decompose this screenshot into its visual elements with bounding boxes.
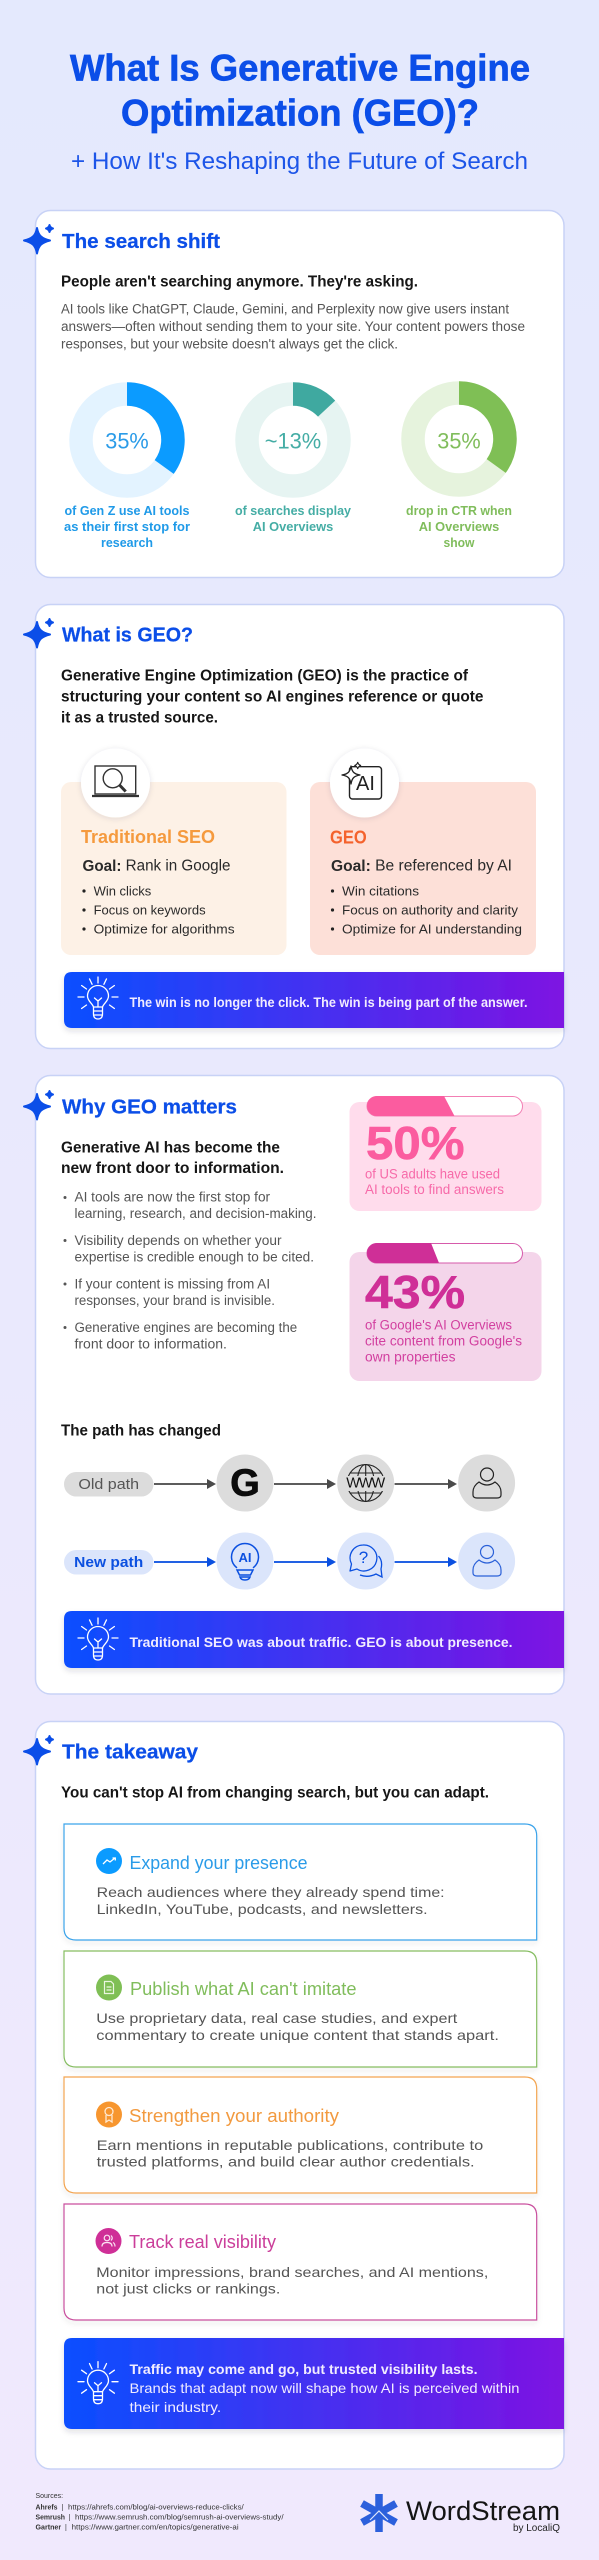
bullet list: Optimize for algorithms (94, 922, 235, 936)
comparison card: traditional SEO (61, 748, 286, 955)
icon: sparkle (24, 1736, 53, 1764)
card body: LinkedIn, YouTube, podcasts, and newsletters. (97, 1901, 428, 1917)
stat label (365, 1318, 522, 1364)
subtitle: + How It's Reshaping the Future of Search (71, 148, 528, 175)
donut chart: 35% CTR drop: show (444, 535, 475, 550)
arrow (154, 1557, 216, 1567)
donut chart: 35% Gen Z: 35% (105, 428, 149, 454)
body text: responses, but your website doesn't always get the click. (61, 336, 398, 352)
body text: AI tools like ChatGPT, Claude, Gemini, and Perplexity now give users instant (61, 302, 509, 316)
card body (96, 2264, 488, 2296)
card body: Monitor impressions, brand searches, and AI mentions, (96, 2264, 488, 2280)
arrow (274, 1479, 336, 1489)
new path label (64, 1550, 154, 1574)
icon: sparkle (24, 225, 53, 254)
bullet list: AI tools are now the first stop for (74, 1190, 271, 1204)
icon: light bulb (78, 977, 118, 1019)
icon: sparkle (24, 619, 53, 648)
sources (36, 2493, 284, 2532)
icon: AI badge (330, 748, 399, 818)
icon: chat question (337, 1532, 394, 1590)
body text: answers—often without sending them to your site. Your content powers those (61, 319, 525, 334)
progress bar (367, 1243, 522, 1263)
callout text: Brands that adapt now will shape how AI is perceived within (130, 2380, 520, 2396)
stat label: of Google's AI Overviews (365, 1318, 512, 1332)
heading: The takeaway (62, 1740, 199, 1764)
tagline: by LocaliQ (513, 2523, 560, 2534)
donut chart: 35% Gen Z: research (101, 535, 153, 550)
panel: the search shift (24, 210, 564, 578)
bullet list: front door to information. (74, 1336, 227, 1352)
old path label: Old path (78, 1476, 139, 1493)
comparison card: GEO (310, 748, 536, 955)
definition text: structuring your content so AI engines reference or quote (61, 688, 484, 706)
stat label: of US adults have used (365, 1166, 500, 1182)
donut chart: 35% CTR drop: drop in CTR when (406, 503, 512, 518)
arrow (395, 1479, 457, 1489)
title (70, 48, 530, 134)
panel: why GEO matters (24, 1076, 564, 1694)
icon: people (96, 2228, 122, 2254)
card title: Track real visibility (129, 2232, 276, 2252)
donut chart: 35% CTR drop (406, 393, 512, 550)
bullet list: Optimize for AI understanding (342, 922, 522, 936)
panel: the takeaway (24, 1722, 564, 2469)
callout text: Traditional SEO was about traffic. GEO is about presence. (130, 1634, 512, 1650)
stat label: AI tools to find answers (365, 1182, 504, 1197)
sources: Gartner (36, 2524, 61, 2532)
callout banner (64, 1611, 564, 1668)
sources: | (68, 2514, 70, 2522)
heading: What is GEO? (62, 624, 193, 646)
bullet list: Focus on authority and clarity (342, 902, 519, 918)
icon: globe www (337, 1454, 394, 1512)
icon: trend line (96, 1848, 122, 1874)
icon: person (458, 1454, 515, 1512)
icon: Google: G (230, 1462, 260, 1504)
stat number: 43% (365, 1266, 465, 1318)
definition text (61, 668, 484, 726)
donut chart: 35% CTR drop: AI Overviews (419, 519, 499, 534)
card body (97, 1884, 445, 1917)
arrow (395, 1557, 457, 1567)
bullet list: Focus on keywords (94, 902, 206, 918)
icon: globe www: WWW (346, 1476, 386, 1492)
lead text: new front door to information. (61, 1160, 284, 1177)
sources: https://www.semrush.com/blog/semrush-ai-overviews-study/ (75, 2514, 284, 2522)
donut chart: 13% AI Overviews: of searches display (235, 503, 352, 518)
icon: award ribbon (96, 2102, 122, 2128)
card title: Strengthen your authority (129, 2106, 339, 2126)
bullet list: learning, research, and decision-making. (74, 1206, 316, 1221)
callout text: Traffic may come and go, but trusted visibility lasts. (130, 2361, 478, 2377)
tip card: expand your presence (64, 1824, 537, 1940)
icon: sparkle (24, 1091, 53, 1120)
definition text: it as a trusted source. (61, 710, 218, 726)
callout banner (64, 2338, 564, 2429)
card body: Use proprietary data, real case studies, and expert (96, 2010, 457, 2026)
goal: Goal: Rank in Google (82, 858, 230, 874)
stat number: 50% (366, 1117, 464, 1169)
icon: light bulb (78, 1618, 118, 1660)
bullet list (82, 884, 235, 936)
sources: Ahrefs (36, 2504, 58, 2512)
lead sentence: You can't stop AI from changing search, but you can adapt. (61, 1784, 489, 1802)
tip card: track real visibility (64, 2204, 537, 2320)
sources: https://www.gartner.com/en/topics/generative-ai (72, 2524, 239, 2532)
heading: The search shift (62, 230, 220, 253)
donut chart: 13% AI Overviews: AI Overviews (253, 519, 333, 534)
icon: AI bulb (216, 1532, 274, 1590)
title: What Is Generative Engine (70, 48, 530, 88)
old path label (64, 1472, 154, 1496)
progress bar (367, 1096, 522, 1116)
lead text (61, 1140, 284, 1177)
panel: what is GEO (24, 604, 564, 1048)
icon: Google (216, 1454, 274, 1512)
sources: Semrush (36, 2514, 65, 2522)
donut chart: 13% AI Overviews: ~13% (265, 428, 321, 454)
wordmark: WordStream (406, 2496, 560, 2526)
new path label: New path (74, 1554, 143, 1571)
card body (97, 2137, 483, 2170)
icon: AI badge: AI (356, 773, 375, 795)
card body: not just clicks or rankings. (96, 2280, 280, 2296)
heading: Why GEO matters (62, 1096, 237, 1118)
card title: GEO (330, 828, 367, 848)
bullet list: Generative engines are becoming the (74, 1320, 297, 1335)
icon: laptop with magnifier (81, 748, 150, 818)
definition text: Generative Engine Optimization (GEO) is the practice of (61, 668, 469, 684)
sources: | (65, 2524, 67, 2532)
body text (61, 302, 525, 352)
bullet list: responses, your brand is invisible. (74, 1293, 275, 1308)
card title: Publish what AI can't imitate (130, 1979, 356, 1999)
tip card: publish what AI can't imitate (64, 1951, 537, 2067)
icon: WordStream mark (362, 2494, 396, 2532)
arrow (274, 1557, 336, 1567)
card title: Expand your presence (130, 1853, 308, 1873)
bullet list (331, 884, 522, 936)
stat label: cite content from Google's (365, 1334, 522, 1348)
lead text: Generative AI has become the (61, 1140, 280, 1156)
lead sentence: People aren't searching anymore. They're asking. (61, 274, 418, 290)
title: Optimization (GEO)? (121, 92, 479, 134)
icon: document (96, 1974, 122, 2000)
callout text (130, 2361, 520, 2415)
stat card: 43% (350, 1243, 542, 1381)
card body (96, 2010, 499, 2043)
card title: Traditional SEO (81, 827, 215, 847)
donut chart: 35% Gen Z: of Gen Z use AI tools (64, 503, 190, 518)
sources: | (62, 2504, 64, 2512)
icon: light bulb (78, 2362, 118, 2404)
arrow (154, 1479, 216, 1489)
donut chart: 13% AI Overviews (235, 394, 352, 534)
sources: Sources: (36, 2493, 63, 2500)
flow: new path (64, 1532, 515, 1590)
icon: AI bulb: AI (238, 1550, 252, 1565)
sources: https://ahrefs.com/blog/ai-overviews-reduce-clicks/ (68, 2504, 244, 2512)
goal: Goal: Be referenced by AI (331, 858, 512, 874)
stat label: own properties (365, 1350, 456, 1364)
bullet list: Win citations (342, 884, 420, 898)
logo: WordStream by LocaliQ (362, 2494, 560, 2534)
stat card: 50% (350, 1096, 542, 1211)
stat label (365, 1166, 504, 1197)
card body: trusted platforms, and build clear author credentials. (97, 2154, 475, 2170)
callout banner (64, 972, 564, 1028)
donut chart: 35% Gen Z (64, 394, 190, 550)
donut chart: 35% CTR drop: 35% (437, 428, 481, 454)
bullet list: If your content is missing from AI (74, 1276, 270, 1292)
icon: chat question: ? (359, 1548, 368, 1567)
callout text: their industry. (130, 2399, 221, 2415)
donut chart: 35% Gen Z: as their first stop for (64, 519, 190, 534)
callout text: The win is no longer the click. The win is being part of the answer. (130, 994, 528, 1010)
card body: Earn mentions in reputable publications, contribute to (97, 2137, 483, 2153)
bullet list: expertise is credible enough to be cited. (74, 1250, 314, 1264)
tip card: strengthen your authority (64, 2077, 537, 2193)
card body: commentary to create unique content that stands apart. (96, 2027, 499, 2043)
subheading: The path has changed (61, 1422, 221, 1440)
bullet list (64, 1190, 316, 1352)
card body: Reach audiences where they already spend time: (97, 1884, 445, 1900)
bullet list: Win clicks (94, 884, 152, 898)
bullet list: Visibility depends on whether your (74, 1233, 282, 1248)
icon: person (458, 1532, 515, 1590)
flow: old path (64, 1454, 515, 1512)
